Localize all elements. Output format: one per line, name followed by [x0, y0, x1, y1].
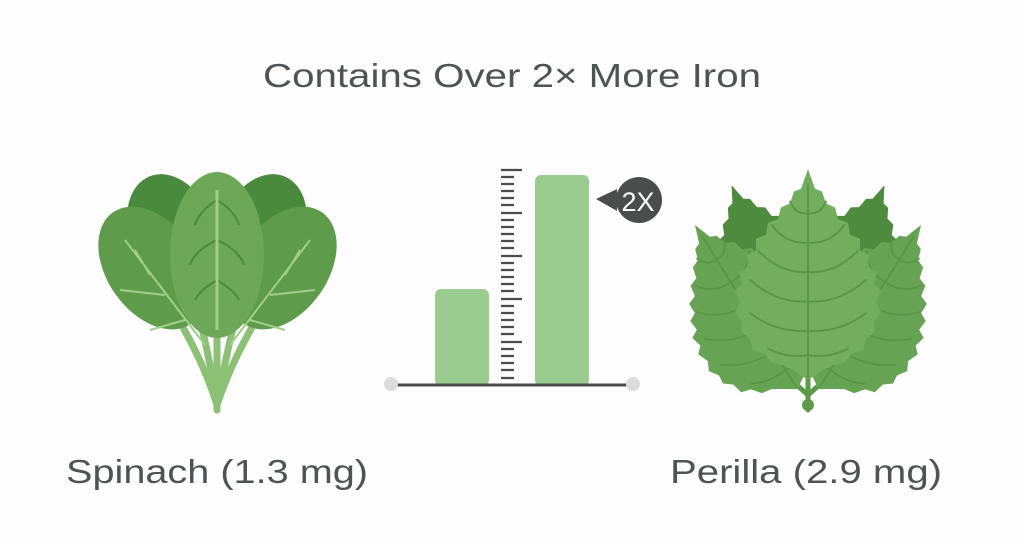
scale ticks	[501, 170, 522, 378]
bar chart	[384, 170, 662, 391]
label: spinach: Spinach (1.3 mg)	[66, 453, 368, 490]
badge: 2X	[596, 177, 662, 223]
bar: spinach	[435, 289, 489, 386]
axis	[392, 384, 633, 386]
title: Contains Over 2× More Iron	[263, 57, 761, 94]
back leaves	[674, 162, 858, 378]
stems	[160, 290, 275, 410]
label: perilla: Perilla (2.9 mg)	[670, 453, 942, 490]
bar: perilla	[535, 175, 589, 386]
stems	[780, 370, 836, 410]
icon: perilla	[639, 162, 977, 424]
badge: 2X: 2X	[621, 187, 655, 217]
side leaves	[76, 186, 359, 350]
center leaf	[735, 169, 881, 380]
back leaves	[111, 161, 233, 303]
side leaves	[639, 190, 853, 424]
center leaf	[170, 172, 264, 338]
icon: spinach	[76, 161, 359, 410]
